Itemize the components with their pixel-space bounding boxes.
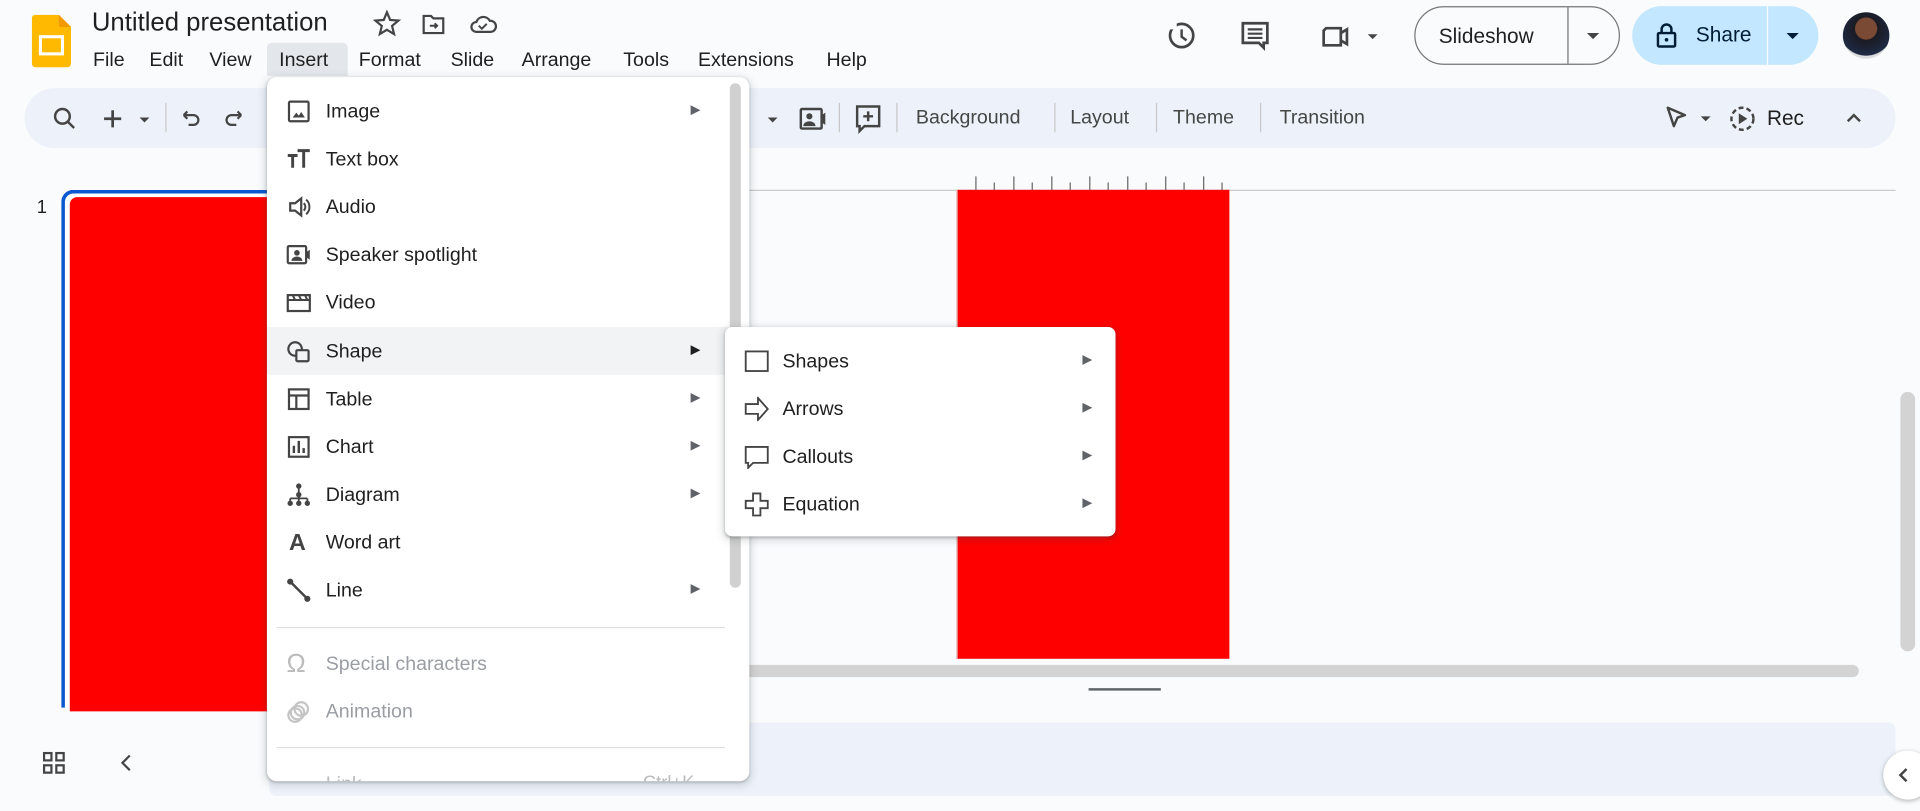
menu bar: Tools — [623, 50, 669, 71]
item: table: Table — [326, 389, 373, 410]
item: word art: Word art — [326, 533, 400, 553]
item: chart: Chart — [326, 437, 374, 458]
ruler — [750, 176, 1896, 191]
document title: Untitled presentation — [92, 9, 328, 37]
horizontal scrollbar — [735, 665, 1859, 677]
sub: equation — [744, 492, 1092, 516]
item: word art — [289, 530, 400, 556]
item: text box: Text box — [326, 149, 399, 170]
toolbar right controls: Rec — [1767, 107, 1804, 130]
toolbar text buttons: Background — [916, 108, 1020, 129]
app logo — [32, 14, 71, 68]
side panel toggle — [1883, 751, 1920, 800]
header right icons — [1168, 22, 1378, 51]
share button — [1632, 6, 1818, 65]
item: word art: A — [289, 530, 306, 556]
toolbar right controls — [1666, 106, 1861, 131]
insert menu — [267, 77, 749, 781]
item: image: Image — [326, 102, 380, 122]
item: audio: Audio — [326, 197, 376, 218]
menu bar: Arrange — [522, 50, 591, 71]
item: speaker spotlight: Speaker spotlight — [326, 245, 477, 266]
avatar — [1843, 12, 1889, 59]
item: diagram: Diagram — [326, 485, 400, 506]
sub: arrows: Arrows — [782, 399, 843, 420]
sub: callouts: Callouts — [782, 447, 853, 468]
item: line — [287, 578, 700, 602]
item: video — [286, 293, 375, 313]
item: special characters (disabled): Ω — [287, 650, 306, 678]
item: chart — [288, 436, 700, 458]
vertical scrollbar — [1900, 392, 1915, 651]
slideshow button: Slideshow — [1439, 24, 1534, 48]
menu bar — [93, 43, 867, 76]
menu bar: Help — [827, 50, 867, 71]
slide thumbnail — [61, 190, 282, 708]
item: animation (disabled) — [287, 701, 413, 723]
title icons — [373, 10, 498, 36]
text: Theme — [1173, 108, 1234, 129]
menu bar: Extensions — [698, 50, 794, 71]
item: special characters (disabled) — [287, 650, 487, 678]
item: audio — [289, 196, 376, 218]
text: Transition — [1280, 108, 1365, 129]
item: shape (highlighted) — [267, 327, 749, 375]
menu bar: Edit — [149, 50, 183, 71]
shape submenu — [725, 327, 1116, 536]
sub: arrows — [744, 396, 1092, 422]
item: special characters (disabled): Special characters — [326, 654, 487, 675]
slideshow button — [1414, 6, 1620, 65]
slide number: 1 — [37, 197, 47, 218]
item: video: Video — [326, 293, 375, 313]
sub: shapes: Shapes — [782, 351, 849, 372]
sub: shapes — [744, 350, 1092, 372]
menu bar: Insert — [279, 50, 328, 71]
text: Layout — [1070, 108, 1129, 129]
toolbar left icons — [54, 108, 242, 129]
item: shape (highlighted): Shape — [326, 342, 382, 362]
item: diagram — [288, 483, 700, 506]
sub: callouts — [744, 446, 1092, 469]
slide canvas — [956, 190, 1229, 659]
speaker notes — [269, 722, 1896, 796]
item: text box — [288, 149, 399, 170]
bottom left controls — [43, 752, 130, 774]
menu bar: Format — [359, 50, 421, 71]
item: image — [288, 100, 700, 122]
share button: Share — [1696, 23, 1751, 47]
toolbar — [24, 88, 1896, 148]
item: table — [288, 388, 700, 410]
sub: equation: Equation — [782, 495, 860, 516]
toolbar middle icons — [768, 105, 880, 134]
item: line: Line — [326, 580, 363, 601]
item: animation (disabled): Animation — [326, 702, 413, 722]
menu bar: Slide — [451, 50, 494, 71]
menu bar: File — [93, 50, 125, 71]
menu bar: View — [209, 50, 251, 71]
item: link (cut off) — [326, 773, 694, 782]
